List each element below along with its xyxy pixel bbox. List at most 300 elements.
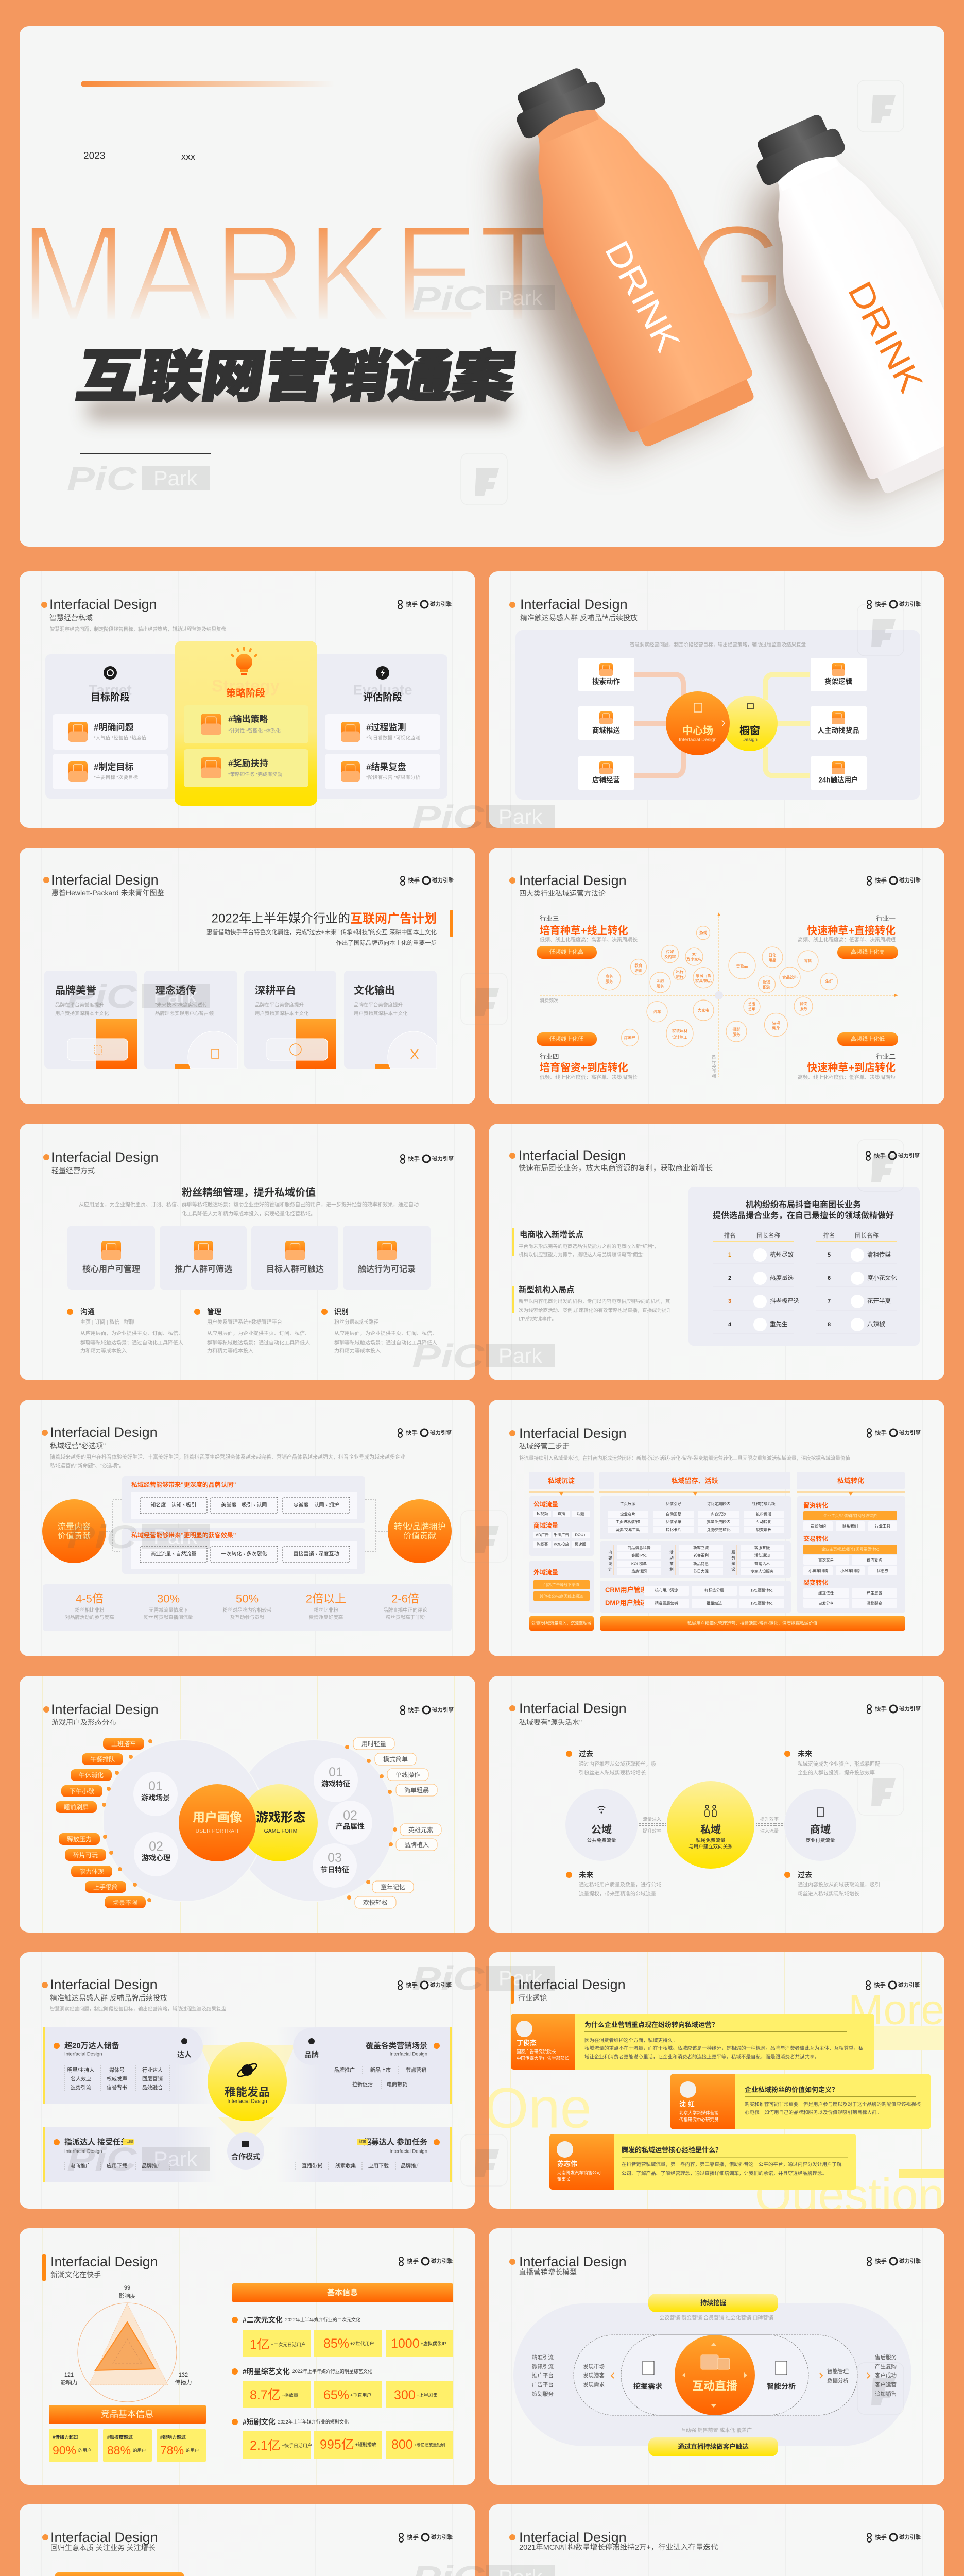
customer effect panel: 商业流量 › 自然流量: [151, 1551, 196, 1557]
retention block: 主页展示: [620, 1501, 635, 1506]
bubble labels: 服务: [656, 983, 664, 988]
block: talent reserve: 媒体号: [109, 2067, 125, 2073]
bubble labels: 出行: [676, 969, 684, 974]
panel: cover: [20, 26, 964, 547]
brand logo: 快手: [408, 1706, 420, 1714]
stats panel: 无需减流量情况下: [149, 1607, 188, 1614]
quote card 3: 在抖音运营私域流量，第一靠内容，第二靠直播，借助抖音这一公平的平台，通过内容分发让用户了解: [622, 2162, 842, 2168]
retention block: 留资/交易工具: [615, 1527, 640, 1532]
quadrant top left: 低频、线上化程度高：高客单、决策周期长: [540, 937, 638, 943]
brand logo: [867, 600, 921, 609]
brand logo: 磁力引擎: [899, 1705, 921, 1712]
column: manage: 从应用层面，为企业提供主页、订阅、私信、: [207, 1330, 310, 1336]
watermarks: Park: [153, 2148, 198, 2171]
brand identity panel: 美誉度 吸引 › 认同: [221, 1501, 267, 1509]
bubble labels: 金融: [656, 978, 664, 983]
left lists: [532, 2354, 605, 2397]
panel: slide 12 industry lens: [485, 1952, 944, 2222]
slide heading: Interfacial Design: [50, 2530, 158, 2545]
CRM DMP block: DMP用户触达: [605, 1599, 647, 1606]
bubble labels: 教育: [634, 962, 643, 968]
commercial domain circle: [784, 1789, 856, 1861]
brand logo: 磁力引擎: [899, 601, 921, 607]
outline tags: 童年记忆: [381, 1883, 405, 1891]
section: short drama: 2.1亿+快手日活用户: [250, 2438, 312, 2453]
slide heading: 将流量持续引入私域量水池，在抖音内形成运营闭环：新增-沉淀-活跃-转化-留存-裂变精细运营转化工具无限次重复激活私域流量，深度挖掘私域流量价值: [519, 1455, 850, 1461]
slide heading: [509, 873, 627, 897]
orange tags: 场景不限: [113, 1899, 137, 1906]
content block: 老客福利: [693, 1553, 709, 1558]
block: talent reserve: 信誉背书: [107, 2084, 127, 2091]
bubble labels: 配饰: [763, 984, 771, 989]
brand logo: 快手: [406, 1981, 418, 1989]
growth point text: 电商收入新增长点: [520, 1229, 583, 1240]
CRM DMP block: 核心用户沉淀: [655, 1588, 678, 1593]
white circles left: 游戏心理: [142, 1854, 170, 1862]
brand logo: 磁力引擎: [431, 2534, 453, 2540]
left lists: 精准引流: [532, 2354, 554, 2361]
panel: slide 16 MCN chart: [489, 2504, 944, 2576]
brand identity panel: 私域经营能够带来"更深度的品牌认同": [131, 1481, 236, 1488]
note bottom right: 过去: [798, 1871, 812, 1879]
stats panel: 费情净复好度高: [309, 1615, 343, 1621]
panel: slide 14 live model: [489, 2228, 944, 2485]
left lists: 推广平台: [532, 2372, 554, 2379]
panel: slide 4 quadrant: [489, 848, 944, 1104]
new entrants text: 新型机构入局点: [519, 1285, 575, 1294]
orange circle right: 转化/品牌拥护: [394, 1522, 445, 1531]
brand logo: 磁力引擎: [899, 2534, 921, 2540]
slide heading: 新潮文化在快手: [50, 2270, 101, 2279]
brand logo: 磁力引擎: [432, 877, 454, 884]
model pill: [513, 2303, 911, 2446]
bubble labels: 培训: [634, 968, 643, 973]
right lists: 售后服务: [875, 2354, 897, 2361]
axes: 线上化程度: [711, 1055, 717, 1078]
card: platform: [244, 971, 336, 1069]
axes: 消费频次: [540, 997, 558, 1003]
brand identity panel: [122, 1476, 365, 1523]
content block: 活动通知: [754, 1553, 770, 1558]
quote card 3: 公司、了解产品、了解经营理念，通过直播详细培训车，让我们的承诺，并且穿透经品牌理念。: [622, 2170, 827, 2176]
node boxes right: 货架逻辑: [824, 677, 852, 685]
quadrant top left: 低频线上化高: [549, 948, 583, 955]
connectors left: [634, 674, 683, 776]
white circles right: 节日特征: [320, 1866, 349, 1874]
content block: 动: [669, 1555, 674, 1560]
brand logo: [401, 1706, 454, 1715]
orange tags: 上手很简: [93, 1884, 118, 1891]
block: marketing scenes: 品牌推广: [334, 2067, 355, 2073]
stats panel: 30%: [157, 1592, 180, 1605]
competitor stat cards: [49, 2429, 206, 2462]
yellow center circle: GAME FORM: [264, 1828, 297, 1834]
block: recruit talent: 品牌推广: [401, 2163, 421, 2169]
stats panel: [43, 1584, 452, 1631]
ranking panel: 抖老板严选: [770, 1297, 800, 1304]
content block: 商品信息科普: [627, 1545, 651, 1550]
card: brand reputation: 用户赞扬其深耕本土文化: [55, 1011, 109, 1017]
column: identify: 群聊等私域触达场景；通过自动化工具降低人: [334, 1340, 437, 1346]
stage: evaluate: [325, 666, 440, 789]
stats panel: 4-5倍: [76, 1592, 104, 1605]
quote card 2: 沈 虹: [679, 2100, 695, 2108]
card: concept spread: [144, 971, 237, 1069]
competitor stat cards: #触摸度超过: [107, 2434, 133, 2440]
white circles right: 01: [329, 1765, 343, 1780]
competitor button: [49, 2405, 206, 2424]
card: culture: [344, 971, 437, 1069]
quote card 2: 购买和推荐可能非常重要。但是用户参与度以及对于这个品牌的购配值应该视视核: [745, 2101, 921, 2107]
bubble labels: 汽车: [653, 1009, 661, 1014]
brand logo: 快手: [875, 2258, 887, 2265]
slide heading: 2021年MCN机构数量增长停滞维持2万+，行业进入存量迭代: [519, 2543, 718, 2552]
content block: 划: [669, 1566, 674, 1571]
outline tags: 单线操作: [395, 1771, 420, 1778]
ranking panel: 热度量选: [770, 1274, 794, 1281]
bubble labels: 服务: [732, 1031, 741, 1037]
axes: [540, 912, 898, 1078]
ranking panel: 提供选品撮合业务，在自己最擅长的领域做精做好: [713, 1211, 894, 1220]
arrows between domains: 流量注入: [643, 1816, 661, 1822]
small circles: 品牌: [304, 2050, 319, 2059]
bubble labels: 家居百货: [696, 973, 711, 978]
left lists: 发现市场: [583, 2363, 605, 2370]
section title: 粉丝精细管理，提升私域价值: [182, 1187, 316, 1198]
bubble labels: 摄影: [732, 1026, 741, 1031]
competitor stat cards: 88% 的用户: [107, 2444, 146, 2457]
bottles: [473, 53, 964, 499]
quote card 3: [549, 2134, 856, 2190]
brand logo: 快手: [875, 1429, 887, 1436]
card: brand reputation: 品牌美誉: [55, 985, 96, 996]
outer traffic block: 其他社交/电商类线上渠道: [540, 1593, 583, 1598]
ranking panel: 杭州尽致: [770, 1251, 794, 1258]
outline tags: 简单粗暴: [404, 1787, 429, 1794]
stage: strategy: #奖励扶持: [228, 758, 268, 769]
section title: [79, 1187, 419, 1217]
slide heading: Interfacial Design: [50, 2254, 158, 2269]
section: ACG: #二次元文化 2022年上半年媒介行业的二次元文化: [243, 2316, 360, 2324]
watermarks: PiC: [67, 460, 137, 497]
note top left: 引粉丝进入私域实现私域增长: [579, 1769, 646, 1776]
orange circle right: [388, 1499, 452, 1563]
ranking panel: 8: [828, 1321, 831, 1328]
bubble labels: 家装建材: [672, 1028, 687, 1033]
block: assign talent: Interfacial Design: [64, 2148, 102, 2155]
ranking panel: 4: [728, 1321, 732, 1328]
stage: evaluate: #结果复盘: [366, 761, 406, 772]
block: recruit talent: 招募达人 参加任务: [364, 2137, 427, 2146]
growth point text: [512, 1228, 659, 1258]
brand logo: 快手: [874, 1152, 886, 1159]
brand logo: [399, 2257, 453, 2266]
quadrant bottom left: 低频线上化低: [549, 1035, 583, 1042]
bubble labels: 运动: [772, 1020, 780, 1025]
accent gradient bar: [81, 81, 335, 87]
commercial domain circle: 商域: [810, 1824, 831, 1836]
section: ACG: 1000+虚拟偶像IP: [391, 2336, 446, 2351]
block: recruit talent: [295, 2137, 440, 2171]
column: manage: 用户关系管理系统+数据管理平台: [207, 1319, 282, 1325]
card: concept spread: "未来技术"概念实现透传: [155, 1002, 208, 1008]
content block: 议: [731, 1567, 735, 1571]
card: culture: 品牌在平台美誉度提升: [354, 1002, 403, 1008]
top pill: 持续挖掘: [700, 2299, 726, 2307]
right lists: 数据分析: [827, 2377, 849, 2384]
note top right: [784, 1750, 880, 1776]
quote card 1: 中国传媒大学广告学部部长: [517, 2056, 570, 2061]
quadrant top right: 快速种草+直接转化: [807, 925, 896, 937]
orange tags: 午餐排队: [90, 1755, 115, 1763]
orange tags: 碎片可玩: [73, 1851, 98, 1859]
customer effect panel: 一次转化 › 多次裂化: [221, 1551, 267, 1557]
white circles right: 02: [343, 1808, 357, 1823]
node boxes right: [811, 658, 867, 790]
brand logo: [867, 2257, 921, 2266]
ranking panel: 重先生: [770, 1320, 788, 1328]
block: marketing scenes: 电商带货: [387, 2081, 407, 2088]
section: variety: 65%+垂直用户: [323, 2388, 371, 2402]
traffic block: 千川广告: [554, 1532, 569, 1537]
note top left: 过去: [579, 1750, 593, 1758]
bubble labels: 服装: [763, 979, 771, 984]
quadrant bottom left: 培育留资+到店转化: [540, 1061, 628, 1074]
column headers: 私域留存、活跃: [671, 1477, 718, 1485]
slide heading: [509, 2254, 627, 2276]
brand logo: 快手: [875, 1705, 887, 1713]
block: marketing scenes: 覆盖各类营销场景: [366, 2041, 427, 2050]
quadrant top left: 培育种草+线上转化: [540, 924, 628, 937]
note bottom left: 未来: [579, 1871, 593, 1879]
retention block: 自动回复: [666, 1512, 681, 1517]
section: ACG: 85%+Z世代用户: [323, 2336, 374, 2351]
brand logo: 快手: [407, 2258, 419, 2265]
brand logo: 磁力引擎: [432, 1155, 454, 1162]
brand logo: 快手: [406, 1429, 418, 1436]
watermarks: Park: [498, 806, 543, 828]
bubble labels: 3C: [692, 952, 697, 956]
new entrants text: 次为线索给商活动、案例,加速转化的有效策略也是直播，直播成为提升: [519, 1308, 672, 1314]
node boxes left: 店铺经营: [592, 776, 620, 784]
content block: 容: [608, 1555, 612, 1560]
note bottom left: 流量提权，带来更精准的公域流量: [579, 1891, 656, 1897]
connectors right: [765, 674, 810, 776]
brand logo: [867, 1429, 921, 1437]
slide heading: [509, 1148, 713, 1173]
brand logo: [866, 1981, 920, 1990]
white circles right: 03: [328, 1851, 342, 1865]
section: short drama: [232, 2418, 453, 2459]
stage: strategy: [175, 641, 317, 806]
slide heading: 精准触达易感人群 反哺品牌后续投放: [50, 1994, 167, 2002]
yellow circle: [722, 696, 778, 751]
panel: slide 3 HP plan: [20, 848, 475, 1104]
outline tags: 模式简单: [383, 1756, 408, 1763]
quadrant top right: [798, 915, 898, 959]
radar chart: 132: [179, 2372, 188, 2378]
traffic block: DOU+: [575, 1532, 586, 1537]
top pill: [648, 2294, 778, 2321]
ranking panel: 排名: [823, 1232, 835, 1239]
conversion block: 小风车团购: [840, 1568, 860, 1573]
ranking panel: 八辣椒: [867, 1320, 885, 1328]
slide heading: [42, 1977, 227, 2012]
headline block: 作出了国际品牌迈向本土化的重要一步: [336, 939, 437, 946]
slide heading: [41, 597, 227, 633]
column: communicate: [67, 1308, 183, 1354]
stage: evaluate: 评估阶段: [363, 691, 402, 703]
retention block: 私信菜单: [666, 1519, 681, 1524]
right lists: 客户成功: [875, 2372, 897, 2379]
brand logo: 快手: [408, 877, 420, 884]
conversion block: 交易转化: [803, 1535, 828, 1543]
card: brand reputation: [44, 971, 137, 1069]
brand logo: 磁力引擎: [430, 1981, 452, 1988]
left lists: 策划服务: [532, 2391, 554, 2397]
right lists: 智能管理: [827, 2368, 849, 2375]
stage: strategy: #输出策略: [228, 714, 268, 724]
ranking panel: 度小花文化: [867, 1274, 897, 1281]
bottom bars: 私域用户精细化管理运营，持续活跃-留存-转化，深度挖掘私域价值: [687, 1621, 818, 1626]
node boxes left: 商城推送: [592, 726, 620, 735]
decorative word More: [852, 1995, 944, 2050]
stage: strategy: *策略即任务 *完成有奖励: [228, 772, 282, 778]
customer effect panel: [122, 1528, 365, 1574]
diagram panel: [515, 630, 920, 800]
quadrant top left: 行业三: [540, 915, 559, 922]
basic info button: 基本信息: [327, 2287, 358, 2297]
decorative word More: More: [848, 1987, 944, 2033]
conversion block: 企业主页/私信/群/订阅号收留资: [823, 1513, 877, 1518]
small circles: 达人: [177, 2050, 192, 2059]
CRM DMP block: 1V1建联转化: [750, 1600, 773, 1605]
panel: slide 6 ranking: [489, 1124, 944, 1380]
big word MARKETING: MARKETING: [20, 196, 787, 350]
bubble labels: 设计施工: [672, 1035, 687, 1040]
orange tags: 午休消化: [79, 1772, 104, 1779]
column: communicate: 从应用层面，为企业提供主页、订阅、私信、: [80, 1330, 183, 1336]
node boxes right: 24h触达用户: [818, 776, 858, 784]
brand logo: [398, 600, 452, 609]
orange circle: 中心场: [682, 725, 713, 737]
slide heading: 智慧经营私域: [49, 614, 93, 622]
slide heading: [43, 1149, 159, 1175]
big backing circles: [103, 1740, 394, 1902]
orange tags: 下午小歇: [70, 1788, 94, 1795]
quadrant bottom right: 快速种草+到店转化: [807, 1062, 896, 1074]
dashed connectors: [106, 1500, 388, 1551]
ranking panel: 排名: [724, 1232, 735, 1239]
stage: evaluate: #过程监测: [366, 722, 406, 733]
stats panel: 粉丝可贡献直播间流量: [144, 1615, 193, 1621]
bottom bars: [529, 1616, 905, 1631]
block: assign talent: 应用下载: [107, 2163, 127, 2169]
note top left: [566, 1750, 656, 1776]
right lists: 追加销售: [875, 2391, 897, 2397]
note bottom left: 通过私域用户质量及数量，进行公域: [579, 1882, 661, 1888]
block: talent reserve: 明星/主持人: [67, 2067, 94, 2073]
brand logo: 磁力引擎: [898, 1152, 920, 1159]
bubble labels: 美发: [748, 1002, 756, 1007]
white bottle: [757, 115, 944, 494]
slide heading: [509, 1426, 850, 1461]
brand identity panel: 忠诚度 认同 › 拥护: [294, 1501, 339, 1509]
retention block: 批量免费触达: [707, 1519, 730, 1524]
small circles: 合作模式: [231, 2153, 260, 2161]
slide heading: 随着越来越多的用户在抖音体验美好生活、丰富美好生活，随着抖音原生经营服务体系越来越完善、营销产品体系越来越强大，抖音企业号成为越来越多企业: [50, 1454, 405, 1460]
smart analysis node: [767, 2361, 796, 2391]
panel: slide 13 new culture: [20, 2228, 475, 2485]
slide heading: [43, 1702, 159, 1726]
bubble labels: 家具/饰品: [695, 978, 712, 983]
feature cards: 触达行为可记录: [358, 1264, 416, 1274]
yellow center circle: 游戏形态: [256, 1810, 305, 1825]
bottom pill: 互动强 销售前置 成本低 覆盖广: [681, 2427, 752, 2434]
node boxes left: 搜索动作: [592, 677, 620, 685]
industry bubbles: [598, 926, 837, 1047]
outline tags: 欢快轻松: [363, 1899, 388, 1906]
slide heading: Interfacial Design: [520, 597, 628, 612]
column: identify: 识别: [334, 1308, 349, 1316]
decorative word One: One: [485, 2076, 592, 2140]
quote card 1: 因为在消费者维护这个方面，私域更持久。: [584, 2037, 678, 2043]
retention block: 铁粉促活: [756, 1512, 771, 1517]
yellow center circle: [240, 1784, 318, 1861]
growth point text: 机构以供应链能力为抓手，撮取达人与品牌赚取电商"佣金": [519, 1252, 644, 1258]
quadrant bottom left: [537, 1032, 638, 1081]
brand logo: 磁力引擎: [430, 1429, 452, 1436]
bubble labels: 日化: [768, 952, 777, 957]
stats panel: 粉丝对品牌内容相较带: [222, 1607, 272, 1614]
bubble labels: 大家电: [698, 1008, 710, 1013]
brand logo: 磁力引擎: [432, 1706, 454, 1713]
ranking panel: 团长名称: [855, 1232, 879, 1239]
bubble labels: 美甲: [748, 1007, 756, 1012]
quote card 1: [511, 2014, 874, 2070]
card: concept spread: 品牌理念实现用户心智占领: [155, 1011, 214, 1017]
retention block: 裂变增长: [756, 1527, 771, 1532]
CRM DMP block: 精准圈层营销: [655, 1600, 678, 1605]
center live circle: [675, 2335, 755, 2415]
brand logo: [867, 2533, 921, 2542]
traffic block: 极速版: [575, 1541, 587, 1547]
panel: slide 7 must-have: [20, 1400, 475, 1656]
block: talent reserve: 超20万达人储备: [64, 2041, 119, 2050]
public domain circle: [565, 1789, 638, 1861]
quadrant top right: 高频、线上化程度高：低客单、决策周期短: [798, 937, 896, 943]
note bottom right: 通过内容投放从商域获取流量，吸引: [798, 1882, 880, 1888]
quadrant bottom left: 行业四: [540, 1053, 559, 1060]
private domain circle: 私属免费流量: [696, 1837, 726, 1843]
stats panel: 粉丝相比非粉: [75, 1607, 105, 1614]
white circles left: 02: [149, 1839, 163, 1854]
bubble labels: 服务: [606, 979, 613, 984]
orange tags: 能力体现: [79, 1868, 104, 1875]
cover date: 2023: [83, 150, 105, 162]
orange center circle: [179, 1784, 256, 1861]
quadrant bottom left: 低频、线上化程度低：高客单、决策周期长: [540, 1074, 638, 1081]
outline tags: [345, 1738, 441, 1908]
arrows between domains: [639, 1816, 783, 1834]
stats panel: 对品牌活动的参与度高: [65, 1615, 114, 1621]
need mining node: [633, 2361, 662, 2391]
brand logo: 快手: [875, 877, 887, 884]
block: talent reserve: 行业达人: [142, 2067, 163, 2073]
center yellow circle: Interfacial Design: [227, 2099, 267, 2104]
bubble labels: 用品: [768, 958, 777, 962]
retention block: 互动转化: [756, 1519, 771, 1524]
